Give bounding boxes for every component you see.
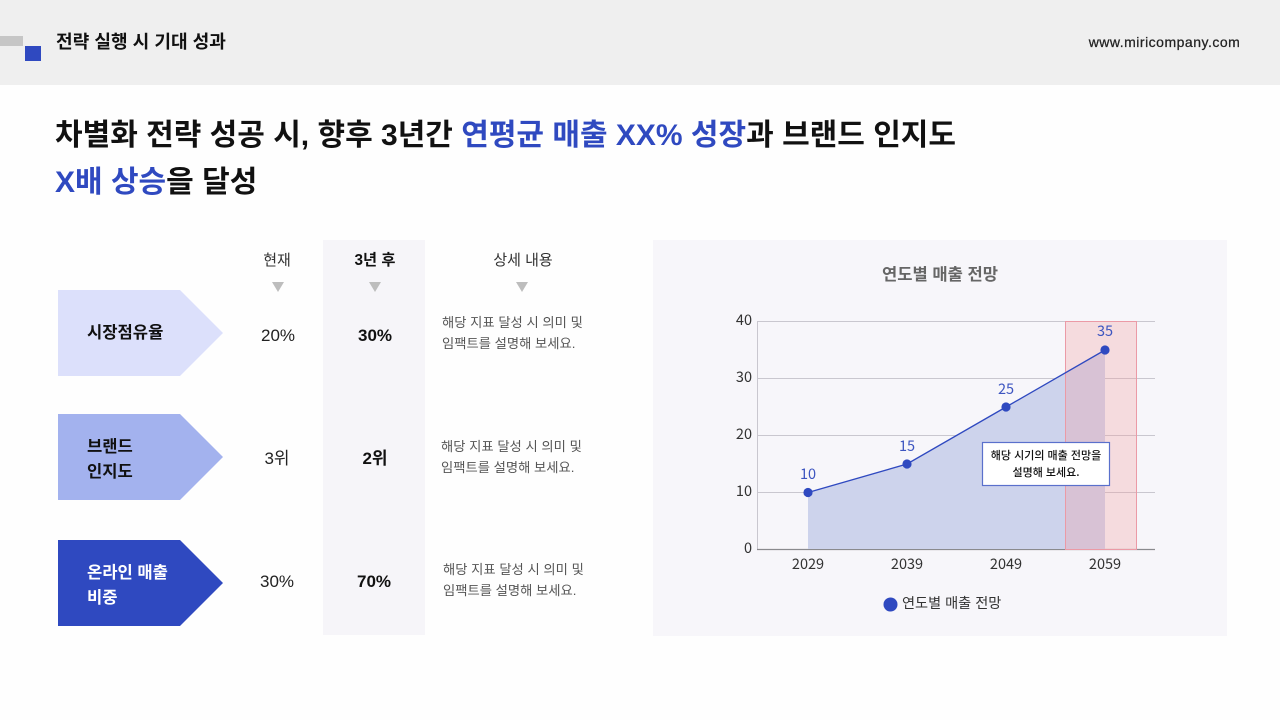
callout — [982, 442, 1110, 486]
column heading: details — [493, 252, 553, 292]
row 3: future value: 70% — [357, 572, 391, 591]
header title: 전략 실행 시 기대 성과 — [56, 32, 226, 52]
row 2: brand awareness arrow — [58, 414, 223, 500]
y axis labels: 0 — [744, 537, 752, 558]
highlight band for 2059 — [1066, 322, 1136, 550]
row 2: current value: 3위 — [264, 449, 290, 468]
row 2: description: 임팩트를 설명해 보세요. — [441, 460, 574, 474]
row 3: current value: 30% — [260, 572, 294, 591]
line chart — [736, 309, 1155, 613]
website address: www.miricompany.com — [1089, 34, 1240, 50]
row 1: market share arrow: 시장점유율 — [87, 323, 163, 342]
row 1: future value: 30% — [358, 326, 392, 345]
main headline: 차별화 전략 성공 시, 향후 3년간 연평균 매출 XX% 성장과 브랜드 인지도 — [55, 119, 956, 152]
chart title: 연도별 매출 전망 — [882, 265, 998, 284]
row 3: online sales arrow — [58, 540, 223, 626]
row 2: brand awareness arrow: 인지도 — [87, 462, 133, 481]
row 2: future value: 2위 — [362, 449, 388, 468]
row 2: description — [441, 439, 582, 474]
main headline: X배 상승을 달성 — [55, 166, 257, 199]
line series — [803, 345, 1110, 497]
row 3: description: 해당 지표 달성 시 의미 및 — [443, 562, 584, 577]
column heading: after 3 years: 3년 후 — [355, 252, 395, 269]
area under line — [808, 350, 1105, 549]
row 2: brand awareness arrow: 브랜드 — [87, 437, 133, 456]
row 1: market share arrow — [58, 290, 223, 376]
icon: header squares — [0, 36, 41, 61]
y axis labels: 10 — [736, 480, 752, 501]
y axis labels — [736, 309, 752, 558]
data labels — [800, 320, 1113, 484]
y axis labels: 30 — [736, 366, 752, 387]
main headline — [55, 119, 956, 199]
callout: 설명해 보세요. — [1012, 464, 1080, 480]
row 1: current value: 20% — [261, 326, 295, 345]
callout: 해당 시기의 매출 전망을 — [991, 447, 1101, 463]
legend: 연도별 매출 전망 — [902, 593, 1001, 613]
row 1: description: 해당 지표 달성 시 의미 및 — [442, 315, 583, 330]
row 3: online sales arrow: 비중 — [87, 588, 118, 607]
column heading: current: 현재 — [263, 252, 291, 269]
y axis labels: 40 — [736, 309, 752, 330]
row 3: description: 임팩트를 설명해 보세요. — [443, 582, 576, 598]
row 3: description — [443, 562, 584, 598]
panel: 3-year column highlight — [323, 240, 425, 635]
panel: chart — [653, 240, 1227, 636]
y axis labels: 20 — [736, 423, 752, 444]
x axis labels: 2039 — [891, 553, 923, 574]
column heading: details: 상세 내용 — [493, 252, 553, 269]
data labels: 15 — [899, 435, 915, 456]
row 2: description: 해당 지표 달성 시 의미 및 — [441, 439, 582, 454]
data labels: 25 — [998, 378, 1014, 399]
x axis labels: 2029 — [792, 553, 824, 574]
data labels: 10 — [800, 463, 816, 484]
data labels: 35 — [1097, 320, 1113, 341]
x axis labels: 2049 — [990, 553, 1022, 574]
header band — [0, 0, 1280, 85]
column heading: after 3 years — [354, 252, 395, 292]
row 1: description — [442, 315, 583, 350]
x axis labels — [792, 553, 1121, 574]
x axis labels: 2059 — [1089, 553, 1121, 574]
row 1: description: 임팩트를 설명해 보세요. — [442, 336, 575, 350]
row 3: online sales arrow: 온라인 매출 — [87, 563, 168, 582]
column heading: current — [263, 252, 291, 292]
